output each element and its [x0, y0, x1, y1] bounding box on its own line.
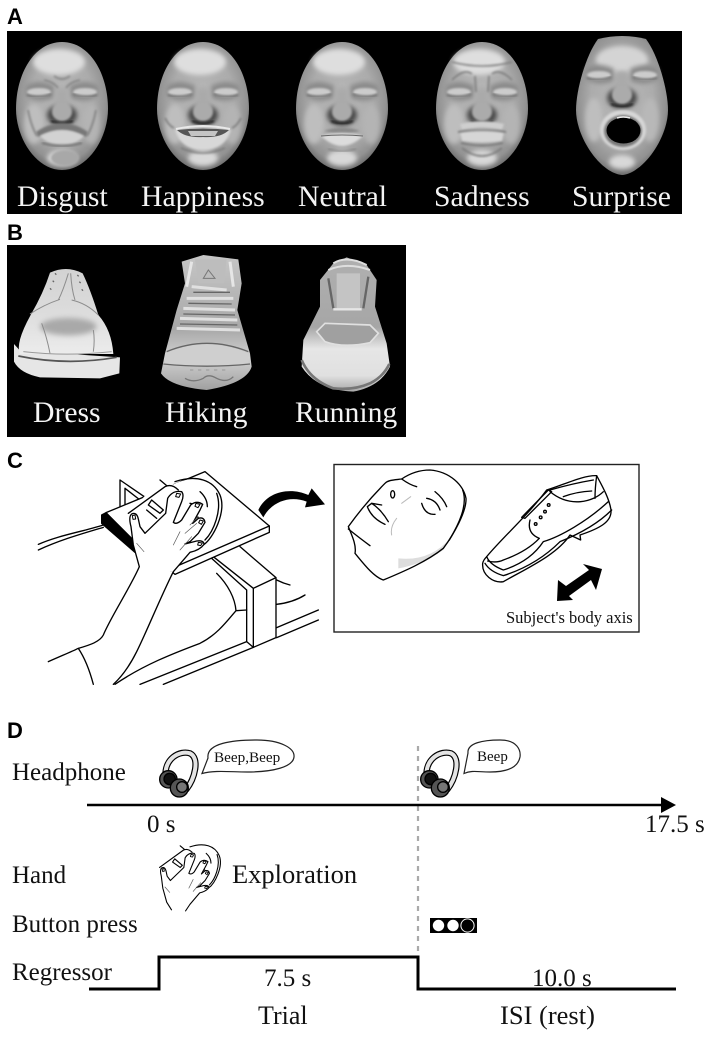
labels: expressions: Happiness	[141, 181, 265, 213]
speech bubble: beep beep	[202, 740, 294, 774]
heading: panel B: B	[7, 220, 23, 245]
labels: expressions	[17, 181, 671, 213]
button press icon	[430, 918, 477, 933]
phase labels: Trial	[258, 1001, 308, 1030]
icon: headphones 2	[421, 753, 457, 797]
row labels: Hand	[12, 862, 67, 889]
shoe: dress	[14, 269, 120, 378]
panel D: timeline	[12, 740, 705, 1030]
speech bubble: beep: Beep	[477, 749, 508, 765]
panel A: facial expressions	[7, 31, 682, 214]
curved arrow	[258, 488, 325, 517]
shoe: hiking	[161, 255, 252, 390]
phase labels	[258, 1000, 595, 1030]
time labels: 0 s	[147, 811, 175, 838]
phase labels: ISI (rest)	[500, 1000, 595, 1030]
labels: expressions: Disgust	[17, 181, 108, 213]
heading: panel C: C	[7, 448, 23, 473]
support frame and bench	[38, 480, 318, 684]
panel B: shoes	[7, 245, 406, 437]
panel C: subject illustration	[38, 472, 325, 684]
speech bubble: beep	[464, 740, 520, 774]
arm	[48, 567, 173, 684]
double arrow: body axis	[557, 564, 602, 601]
labels: shoe types: Hiking	[165, 397, 248, 429]
heading: panel A: A	[7, 4, 23, 29]
dress shoe drawing	[483, 476, 612, 582]
labels: expressions: Surprise	[572, 181, 671, 213]
inset: mask and shoe orientation	[334, 464, 639, 632]
time labels	[147, 811, 705, 838]
black edge of board	[102, 513, 135, 552]
hand on face	[128, 478, 222, 572]
regressor line	[89, 957, 676, 989]
labels: shoe types	[33, 397, 397, 429]
time axis arrow	[87, 797, 676, 813]
labels: shoe types: Dress	[33, 397, 101, 429]
row labels: Regressor	[12, 959, 113, 986]
shoe: running	[302, 257, 390, 392]
board	[106, 472, 269, 574]
face: happiness	[157, 42, 249, 170]
face: sadness	[436, 42, 528, 170]
icon: headphones 1	[160, 753, 196, 797]
speech bubble: beep beep: Beep,Beep	[214, 749, 280, 766]
heading: panel D: D	[7, 718, 23, 743]
labels: shoe types: Running	[295, 397, 397, 429]
label: body axis: Subject's body axis	[506, 608, 633, 627]
icon: hand on mask	[160, 845, 220, 911]
row labels: Button press	[12, 911, 138, 938]
face: disgust	[16, 42, 108, 170]
labels: expressions: Sadness	[434, 181, 530, 213]
face: neutral	[296, 42, 388, 170]
duration labels: 7.5 s	[264, 965, 311, 992]
duration labels	[264, 965, 592, 992]
row labels: Headphone	[12, 759, 126, 786]
face: surprise	[576, 36, 668, 175]
row labels	[12, 759, 138, 986]
dashed divider	[417, 746, 419, 960]
duration labels: 10.0 s	[532, 965, 592, 992]
labels: expressions: Neutral	[298, 181, 387, 213]
label: exploration: Exploration	[232, 859, 357, 889]
time labels: 17.5 s	[645, 811, 705, 838]
mask drawing	[348, 470, 466, 580]
